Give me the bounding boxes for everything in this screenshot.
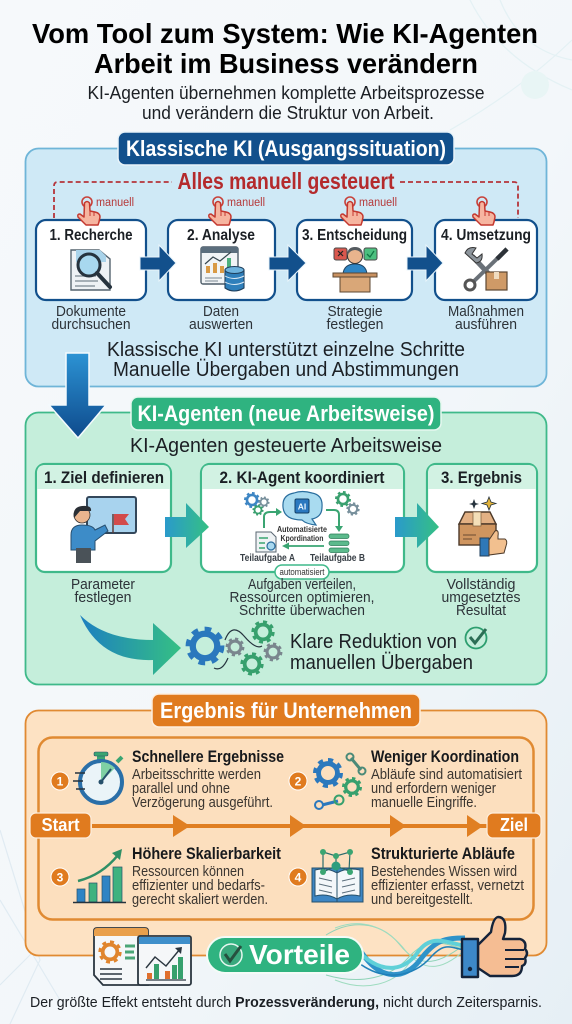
heading: KI-Agenten <box>131 397 441 430</box>
caption: Vollständig <box>446 577 516 593</box>
step: Analyse: 2. Analyse <box>187 227 255 244</box>
label: Teilaufgabe B: Teilaufgabe B <box>310 552 365 564</box>
caption <box>442 577 520 619</box>
icon: hand 4 <box>473 197 495 225</box>
reduction text <box>290 630 473 674</box>
subtitle <box>88 83 484 123</box>
text: und erfordern weniger <box>371 781 496 797</box>
text: gerecht skaliert werden. <box>132 892 268 908</box>
step: Umsetzung: 4. Umsetzung <box>441 227 531 244</box>
footer: Der größte Effekt entsteht durch Prozessveränderung, nicht durch Zeitersparnis. <box>30 994 542 1011</box>
subheading: KI-Agenten gesteuerte Arbeitsweise <box>130 435 442 457</box>
caption: festlegen <box>326 317 384 333</box>
text: Bestehendes Wissen wird <box>371 864 517 880</box>
text: und bereitgestellt. <box>371 892 473 908</box>
title <box>32 18 538 79</box>
icon: dashboard windows <box>94 928 191 985</box>
label: manuell 3: manuell <box>359 197 397 209</box>
step: Ergebnis: 3. Ergebnis <box>441 469 522 487</box>
title: Arbeit im Business verändern <box>94 48 478 79</box>
icon: check circle <box>466 628 486 648</box>
text: Höhere Skalierbarkeit <box>132 845 281 863</box>
inner frame <box>38 738 534 920</box>
text: effizienter erfasst, vernetzt <box>371 878 524 894</box>
icon: stopwatch <box>73 752 122 803</box>
step: Analyse <box>168 220 275 333</box>
badge: automatisiert <box>275 565 329 579</box>
text: Verzögerung ausgeführt. <box>132 795 273 811</box>
caption: festlegen <box>74 590 132 606</box>
caption: Parameter <box>71 577 135 593</box>
text: Ressourcen können <box>132 864 244 880</box>
caption: Dokumente <box>56 304 126 320</box>
arrow 2 <box>269 245 306 281</box>
icon: book with network <box>312 849 363 902</box>
text: effizienter und bedarfs- <box>132 878 265 894</box>
badge: Start: Start <box>42 815 80 835</box>
text: parallel und ohne <box>132 781 230 797</box>
label: manuell 2: manuell <box>227 197 265 209</box>
icon: tools and box <box>465 248 507 290</box>
icon: person with target board <box>71 497 136 563</box>
item 3 <box>51 845 281 908</box>
item 1: 1 <box>57 774 64 788</box>
summary text <box>107 339 465 381</box>
icon: growth chart <box>73 849 126 902</box>
title: Vom Tool zum System: Wie KI-Agenten <box>32 18 538 49</box>
step: Ziel definieren <box>36 464 171 606</box>
arrow: step 1 to 2 <box>165 503 209 548</box>
arrow: step 2 to 3 <box>395 503 439 548</box>
text <box>371 748 522 811</box>
item 4: 4 <box>295 870 302 884</box>
badge: Ziel: Ziel <box>500 815 528 835</box>
caption <box>52 304 130 333</box>
text: Abläufe sind automatisiert <box>371 767 522 783</box>
label: Automatisierte Koordination: Kpordination <box>280 533 324 543</box>
icon: hand 2 <box>209 197 231 225</box>
text: Schnellere Ergebnisse <box>132 748 284 766</box>
panel: Ergebnis für Unternehmen <box>26 694 546 956</box>
arrow: big down arrow <box>49 353 106 438</box>
icon: AI coordination diagram: AI <box>298 502 306 512</box>
label: Automatisierte Koordination <box>277 524 327 543</box>
arrow: curved reduction <box>80 615 181 675</box>
subtitle: KI-Agenten übernehmen komplette Arbeitsprozesse <box>88 83 484 103</box>
caption: Aufgaben verteilen, <box>248 577 356 593</box>
step: Entscheidung: 3. Entscheidung <box>302 227 407 244</box>
label: Automatisierte Koordination: Automatisierte <box>277 524 327 534</box>
item 4 <box>289 845 524 908</box>
item 2: 2 <box>295 774 302 788</box>
heading: Ergebnis <box>152 694 420 727</box>
caption: Ressourcen optimieren, <box>230 590 374 606</box>
caption: Strategie <box>328 304 382 320</box>
text <box>132 845 281 908</box>
step: Recherche: 1. Recherche <box>50 227 133 244</box>
badge: Ziel <box>487 813 541 838</box>
reduction text: manuellen Übergaben <box>290 651 473 674</box>
caption <box>71 577 135 606</box>
icon: thumbs up <box>462 917 527 977</box>
badge: Vorteile: Vorteile <box>249 939 350 970</box>
caption: Resultat <box>456 603 506 619</box>
icon: hand 1 <box>78 197 100 225</box>
icon: chart and database <box>201 247 244 291</box>
item 1 <box>51 748 284 811</box>
label: Teilaufgabe A: Teilaufgabe A <box>240 552 295 564</box>
step: KI-Agent koordiniert: 2. KI-Agent koordiniert <box>220 469 385 487</box>
icon: check <box>220 944 242 966</box>
label: manuell 1: manuell <box>96 197 134 209</box>
icon: decision maker <box>333 247 377 292</box>
caption: umgesetztes <box>442 590 520 606</box>
icon: AI coordination diagram <box>245 492 359 552</box>
badge: Start <box>30 813 91 838</box>
text <box>132 748 284 811</box>
caption: Schritte überwachen <box>239 603 365 619</box>
icon: box with thumb up <box>459 497 507 556</box>
arrow 1 <box>140 245 176 281</box>
panel: Klassische KI <box>26 132 546 386</box>
icon: gears and links <box>315 754 366 809</box>
heading: KI-Agenten: KI-Agenten (neue Arbeitsweise) <box>138 401 434 426</box>
badge: automatisiert: automatisiert <box>280 567 325 577</box>
caption: durchsuchen <box>52 317 130 333</box>
caption: ausführen <box>455 317 517 333</box>
caption: Maßnahmen <box>448 304 524 320</box>
heading: Klassische KI: Klassische KI (Ausgangssituation) <box>126 136 446 161</box>
process line <box>92 815 487 837</box>
heading: Klassische KI <box>118 132 454 165</box>
step: Ergebnis <box>427 464 537 619</box>
text <box>371 845 524 908</box>
caption <box>326 304 384 333</box>
dashed control loop <box>54 182 518 218</box>
arrow 3 <box>407 245 443 281</box>
item 3: 3 <box>57 870 64 884</box>
step: Recherche <box>36 220 146 333</box>
summary text: Manuelle Übergaben und Abstimmungen <box>113 359 459 381</box>
icon: document search <box>71 250 110 290</box>
step: Umsetzung <box>435 220 537 333</box>
item 2 <box>289 748 522 811</box>
icon: gear cluster <box>188 622 281 674</box>
caption <box>230 577 374 619</box>
text: manuelle Eingriffe. <box>371 795 477 811</box>
text: Arbeitsschritte werden <box>132 767 261 783</box>
summary text: Klassische KI unterstützt einzelne Schritte <box>107 339 465 361</box>
step: Entscheidung <box>297 220 412 333</box>
step: KI-Agent koordiniert <box>201 464 404 619</box>
icon: hand 3 <box>341 197 363 225</box>
decorative wave <box>326 924 470 986</box>
panel: KI-Agenten <box>26 397 546 684</box>
badge: Vorteile <box>207 937 363 973</box>
reduction text: Klare Reduktion von <box>290 630 457 653</box>
text: Strukturierte Abläufe <box>371 845 515 863</box>
step: Ziel definieren: 1. Ziel definieren <box>44 469 164 487</box>
caption <box>448 304 524 333</box>
label: Alles manuell gesteuert: Alles manuell gesteuert <box>178 168 395 194</box>
heading: Ergebnis: Ergebnis für Unternehmen <box>160 698 412 723</box>
caption: auswerten <box>189 317 253 333</box>
caption <box>189 304 253 333</box>
text: Weniger Koordination <box>371 748 519 766</box>
subtitle: und verändern die Struktur von Arbeit. <box>142 103 434 123</box>
caption: Daten <box>203 304 239 320</box>
